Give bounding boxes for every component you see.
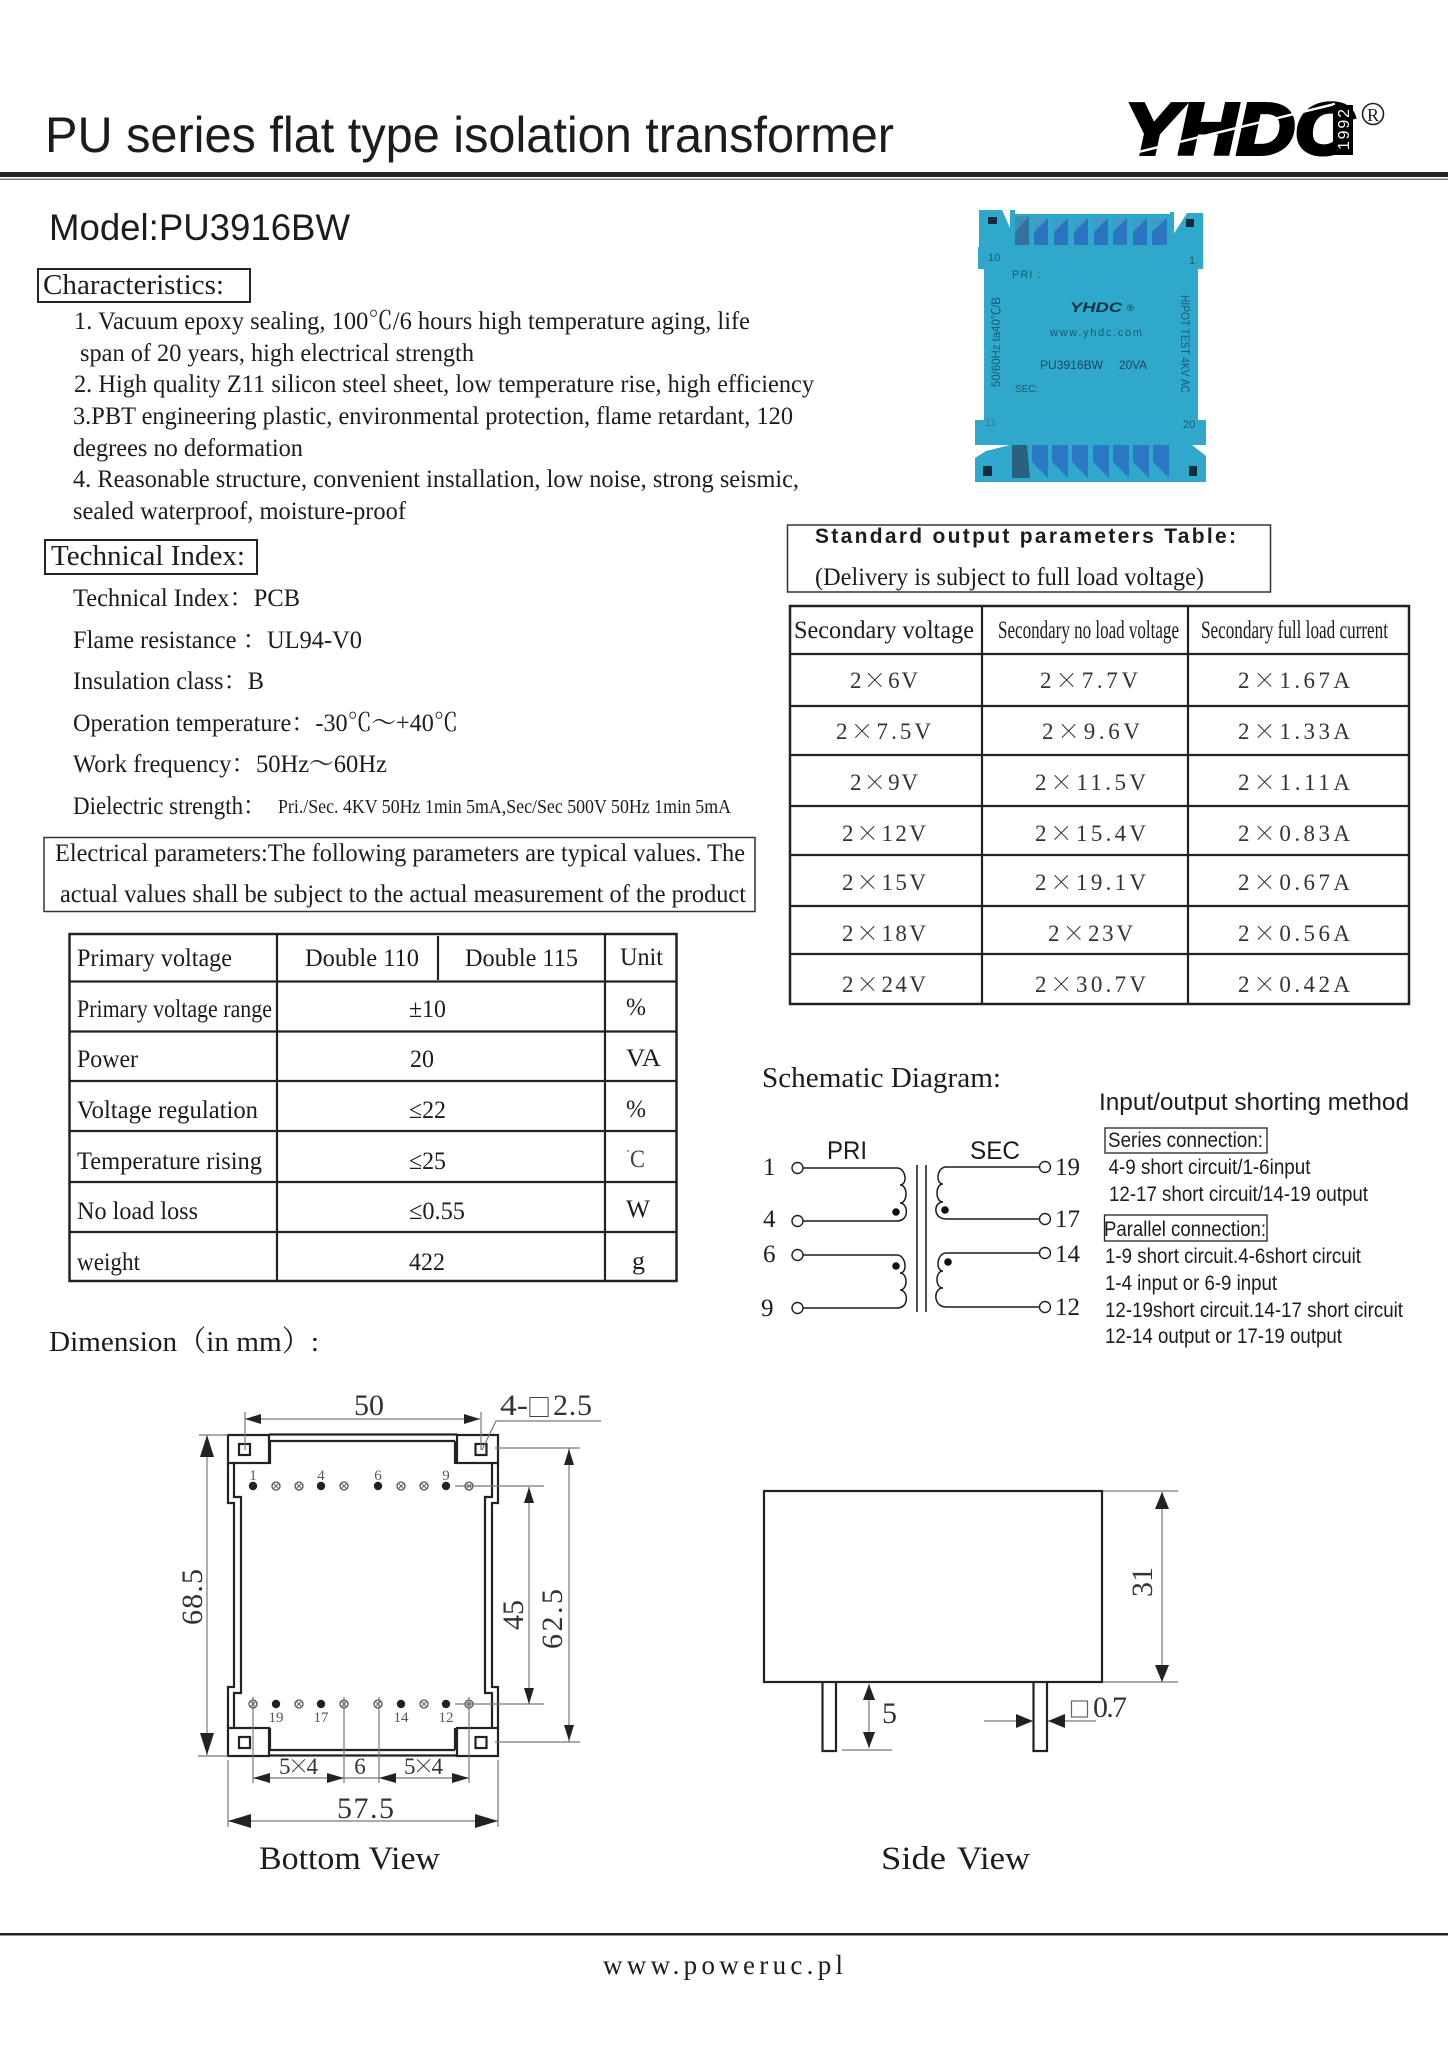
photo: corner holes [983,217,1197,476]
characteristics heading box: Characteristics: [43,269,224,301]
bottom view: dimension hole size: 4- [500,1389,528,1422]
header rule [0,172,1448,180]
photo: printed label text: ® [1127,303,1134,313]
table: standard output parameters: 2×1.33A [1238,713,1350,746]
bottom view: top pin row: 6 [374,1468,382,1484]
table: electrical parameters [70,934,676,1281]
side view: dimension 5: 5 [882,1697,897,1730]
standard output parameters note [788,525,1270,592]
model heading: Model:PU3916BW [49,207,350,248]
technical index list: Work frequency：50Hz～60Hz [73,751,387,778]
table: standard output parameters: 2×24V [842,966,926,999]
technical index heading box: Technical Index: [51,540,245,572]
table: electrical parameters: Primary voltage [77,945,232,972]
photo: printed label text: HIPOT TEST 4KV AC [1178,295,1190,393]
characteristics list: 1. Vacuum epoxy sealing, 100℃/6 hours high temperature aging, life [74,308,750,335]
schematic diagram [761,1137,1080,1322]
schematic: labels: 14 [1055,1241,1080,1268]
photo: bottom fins [1010,445,1178,482]
bottom view: dimension hole size: 2.5 [553,1389,592,1422]
table: standard output parameters: 2×0.56A [1238,915,1350,948]
series connection: Series connection: [1108,1129,1263,1152]
schematic: labels: 19 [1055,1154,1080,1181]
photo: printed label text: www.yhdc.com [1049,327,1142,339]
parallel connection: 1-4 input or 6-9 input [1105,1272,1277,1295]
bottom view: dimension 45: 45 [497,1600,530,1630]
degree mark: C [630,1146,645,1173]
table: standard output parameters: 2×0.42A [1238,966,1350,999]
photo: printed label text: 11 [985,417,996,429]
schematic: labels: 12 [1055,1294,1080,1321]
table: electrical parameters: ≤25 [409,1148,446,1175]
table: standard output parameters: 2×0.83A [1238,815,1350,848]
parallel connection: 1-9 short circuit.4-6short circuit [1105,1245,1361,1268]
table: electrical parameters: weight [77,1249,140,1276]
table: electrical parameters: Double 110 [305,945,419,972]
bottom view: pin pitch dimensions: 5×4 [404,1750,444,1781]
drawing: side view [764,1491,1178,1877]
bottom view: pin pitch dimensions: 5×4 [279,1750,318,1781]
table: electrical parameters: g [632,1248,646,1275]
table: electrical parameters: Unit [620,944,663,971]
table: standard output parameters: Secondary voltage [794,617,974,644]
technical index list: Operation temperature：-30℃～+40℃ [73,710,458,737]
shorting method [1099,1089,1409,1348]
characteristics list: 2. High quality Z11 silicon steel sheet, low temperature rise, high efficiency [74,371,814,398]
series connection [1105,1128,1368,1206]
drawing: bottom view [176,1388,601,1877]
logo: YHDC 1992: R [1367,105,1379,125]
photo: top fins [1010,210,1174,245]
logo: YHDC 1992: YHDC [1125,90,1354,170]
bottom view: dimension 57.5: 57.5 [337,1792,394,1825]
side view: dimension 5 [842,1684,897,1750]
schematic: labels: PRI [827,1137,867,1165]
table: standard output parameters: Secondary no load voltage [998,617,1179,644]
schematic heading: Schematic Diagram: [762,1062,1001,1094]
bottom view: pin pitch dimensions: 6 [354,1754,366,1779]
side view: dimension 0.7: 0.7 [1093,1691,1127,1724]
bottom view: dimension 62.5: 62.5 [536,1589,569,1649]
table: electrical parameters: 20 [410,1046,434,1073]
characteristics list: degrees no deformation [73,435,303,462]
bottom view: dimension 57.5 [228,1760,498,1828]
table: electrical parameters: W [626,1196,650,1223]
technical index list [73,585,731,820]
table: electrical parameters: ≤22 [409,1097,446,1124]
footer url: www.poweruc.pl [603,1950,843,1980]
photo: printed label text: PU3916BW [1040,358,1104,372]
schematic: primary windings [792,1162,906,1314]
table: standard output parameters: 2×9V [850,764,918,797]
table: standard output parameters: 2×7.5V [836,713,931,746]
schematic: labels: 6 [763,1241,776,1268]
bottom view: bottom pin row: 19 [268,1710,284,1726]
dimension heading: Dimension（in mm）: [49,1326,319,1358]
section: technical index [45,540,731,820]
shorting method heading: Input/output shorting method [1099,1089,1409,1116]
table: standard output parameters: 2×30.7V [1035,966,1146,999]
characteristics list: span of 20 years, high electrical strength [80,340,474,367]
photo: printed label text: 20 [1183,419,1195,431]
photo: printed label text: 1 [1189,255,1195,267]
standard output parameters note: Standard output parameters Table: [815,525,1236,548]
technical index list: Flame resistance ：UL94-V0 [73,627,362,654]
bottom view: dimension 68.5: 68.5 [176,1569,209,1625]
electrical parameters note: Electrical parameters:The following parameters are typical values. The [55,840,745,867]
photo: printed label text: 20VA [1119,358,1147,372]
table: standard output parameters [790,606,1409,1004]
table: electrical parameters: % [626,994,646,1021]
logo: YHDC 1992: 1992 [1336,109,1353,150]
side view caption: Side [881,1841,946,1877]
table: standard output parameters: 2×9.6V [1042,713,1140,746]
side view caption: View [957,1841,1030,1877]
schematic: core [917,1165,926,1312]
characteristics list: sealed waterproof, moisture-proof [73,498,407,525]
series connection: 4-9 short circuit/1-6input [1108,1156,1311,1179]
table: electrical parameters: Temperature rising [77,1148,262,1175]
electrical parameters note [44,838,755,912]
bottom view: bottom pin row: 14 [394,1710,409,1726]
bottom view: bottom pin row: 12 [438,1710,454,1726]
bottom view: dimension hole size [482,1388,601,1450]
technical index list: Pri./Sec. 4KV 50Hz 1min 5mA,Sec/Sec 500V 50Hz 1min 5mA [278,796,731,818]
table: standard output parameters: 2×12V [842,815,926,848]
side view: dimension 31: 31 [1126,1567,1159,1597]
table: standard output parameters: 2×15.4V [1035,815,1146,848]
footer rule [0,1933,1448,1936]
standard output parameters note: (Delivery is subject to full load voltage) [815,564,1204,591]
bottom view: dimension hole size: □ [527,1388,551,1423]
schematic: labels: 17 [1055,1206,1080,1233]
bottom view: bottom pin row [249,1700,473,1726]
table: electrical parameters: 422 [409,1249,445,1276]
table: standard output parameters: 2×1.11A [1238,764,1350,797]
bottom view: top pin row: 1 [249,1468,257,1484]
schematic: secondary windings [936,1162,1050,1312]
table: standard output parameters: 2×23V [1048,915,1133,948]
characteristics list: 3.PBT engineering plastic, environmental protection, flame retardant, 120 [73,403,793,430]
parallel connection: 12-14 output or 17-19 output [1105,1325,1342,1348]
table: standard output parameters: 2×0.67A [1238,864,1350,897]
photo: printed label text: SEC: [1015,384,1038,395]
bottom view: top pin row: 9 [442,1468,450,1484]
electrical parameters note: actual values shall be subject to the actual measurement of the product [60,881,746,908]
photo: printed label text [985,252,1195,431]
table: electrical parameters: ≤0.55 [409,1198,465,1225]
table: standard output parameters: 2×1.67A [1238,662,1350,695]
table: electrical parameters: Double 115 [465,945,578,972]
photo: printed label text: PRI : [1012,269,1041,281]
side view: dimension 0.7 [984,1691,1127,1728]
bottom view: dimension 50 [245,1389,481,1450]
characteristics list [73,308,814,525]
table: electrical parameters: Power [77,1046,139,1073]
table: standard output parameters: 2×7.7V [1040,662,1138,695]
parallel connection: 12-19short circuit.14-17 short circuit [1105,1299,1403,1322]
schematic: labels [761,1137,1080,1322]
table: standard output parameters: 2×18V [842,915,926,948]
bottom view: outline [228,1434,498,1756]
table: electrical parameters: Voltage regulation [77,1097,258,1124]
table: electrical parameters: VA [626,1045,661,1072]
side view: dimension 31 [1103,1491,1178,1682]
photo: printed label text: YHDC [1070,299,1123,315]
technical index list: Dielectric strength： [73,793,266,820]
product photo: blue transformer [975,210,1206,482]
schematic: labels: 9 [761,1295,774,1322]
table: standard output parameters: 2×11.5V [1035,764,1146,797]
table: electrical parameters: % [626,1096,646,1123]
series connection: 12-17 short circuit/14-19 output [1109,1183,1368,1206]
schematic: labels: 1 [763,1154,776,1181]
bottom view: dimension 62.5 [495,1448,580,1742]
bottom view: top pin row [249,1468,473,1490]
bottom view caption: Bottom View [259,1841,440,1877]
bottom view: pin pitch dimensions [253,1697,469,1783]
schematic: labels: 4 [763,1206,776,1233]
table: electrical parameters: No load loss [77,1198,198,1225]
table: electrical parameters: Primary voltage range [77,996,272,1023]
table: standard output parameters: 2×19.1V [1035,864,1146,897]
bottom view: dimension 50: 50 [354,1389,384,1422]
photo: corner posts and body [975,210,1206,482]
title: PU series flat type isolation transformer [45,107,894,163]
table: standard output parameters: 2×6V [850,662,918,695]
table: standard output parameters: 2×15V [842,864,926,897]
photo: printed label text: 50/60Hz ta40℃/B [989,297,1003,387]
bottom view: dimension 45 [455,1486,544,1704]
bottom view: dimension 68.5 [176,1435,228,1756]
table: electrical parameters: ±10 [409,996,446,1023]
bottom view: bottom pin row: 17 [314,1710,329,1726]
schematic: labels: SEC [970,1137,1020,1165]
side view: body and pins [764,1491,1102,1751]
characteristics list: 4. Reasonable structure, convenient installation, low noise, strong seismic, [73,466,799,493]
section: characteristics [38,269,814,525]
photo: printed label text: 10 [988,252,1000,264]
parallel connection [1104,1215,1403,1348]
technical index list: Insulation class：B [73,668,264,695]
technical index list: Technical Index：PCB [73,585,300,612]
parallel connection: Parallel connection: [1104,1218,1266,1241]
bottom view: top pin row: 4 [317,1468,325,1484]
